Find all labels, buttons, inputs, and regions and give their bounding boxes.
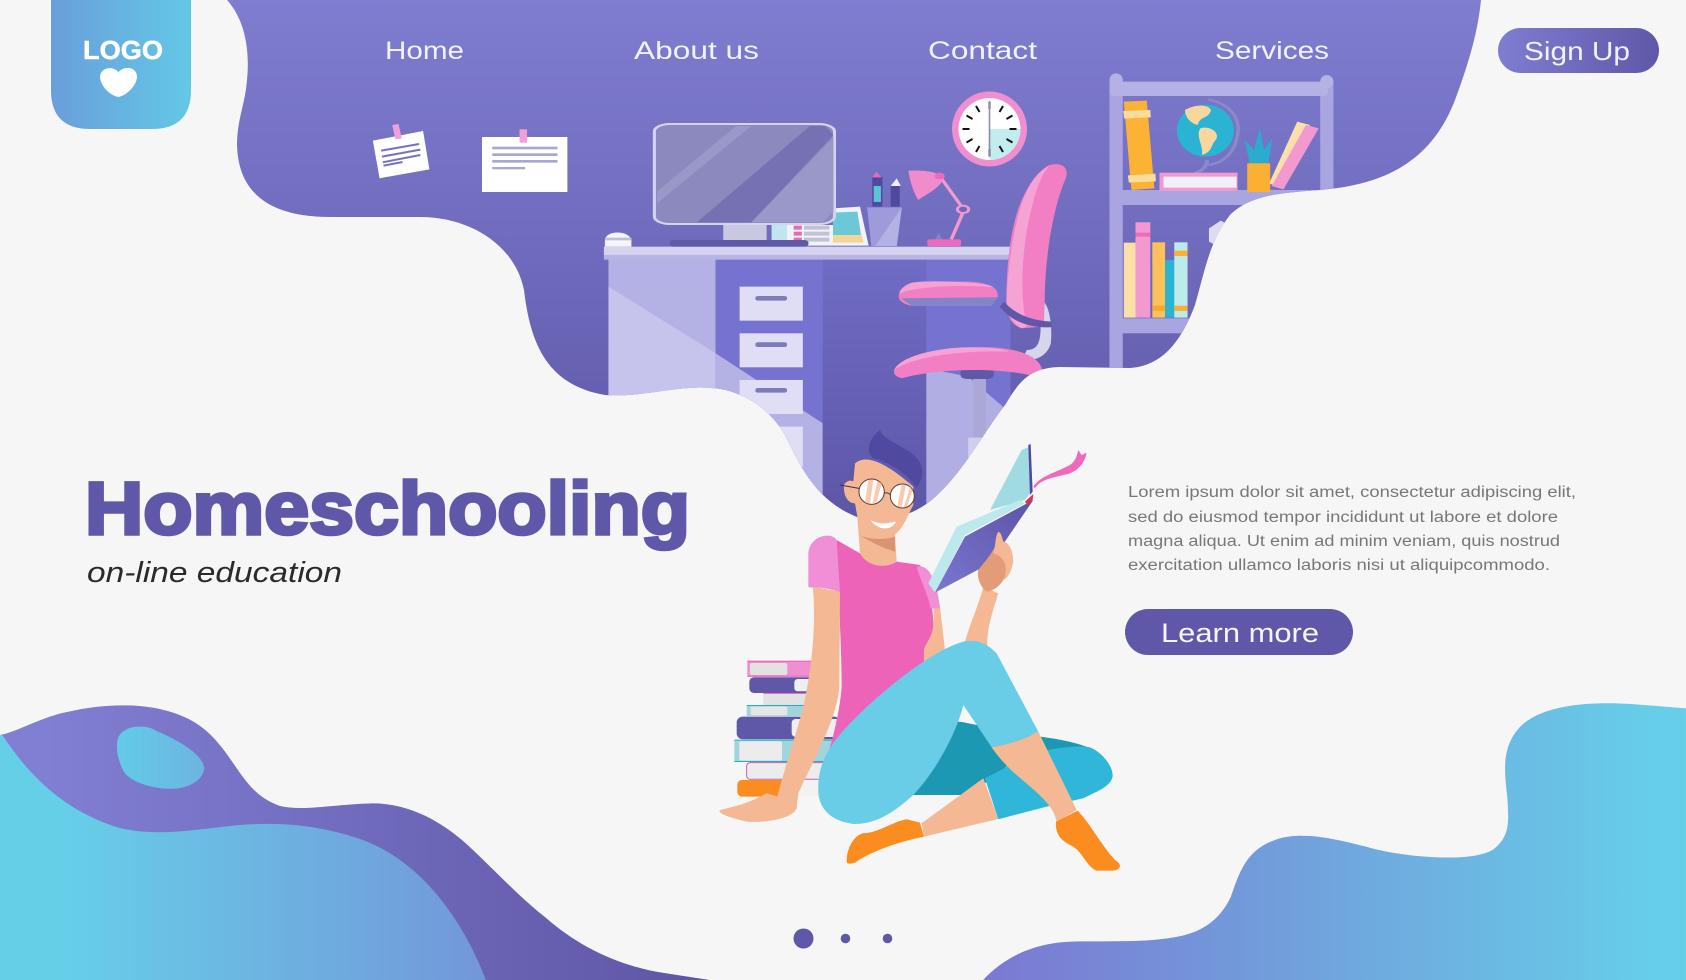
torso shirt	[828, 540, 933, 753]
keyboard	[670, 240, 808, 247]
navigation: Home	[385, 37, 464, 65]
navigation: About us	[634, 37, 759, 65]
icon: heart	[100, 68, 137, 97]
near shin	[992, 732, 1077, 822]
neck	[857, 517, 897, 566]
mouse	[605, 232, 631, 247]
person reading with books	[719, 430, 1120, 871]
subtitle: on-line education	[87, 557, 342, 589]
note left	[373, 124, 429, 178]
lower books	[1124, 222, 1188, 318]
bottom right wave	[983, 703, 1686, 980]
far calf	[922, 778, 998, 837]
hair	[869, 430, 922, 488]
title: Homeschooling	[85, 467, 690, 550]
logo: LOGO	[83, 35, 163, 65]
navigation: Contact	[928, 37, 1037, 65]
mouth	[871, 520, 896, 528]
office chair	[894, 164, 1067, 464]
flat book	[1159, 173, 1238, 191]
plant	[1245, 128, 1272, 192]
pen cup	[867, 172, 902, 246]
learn more button: Learn more	[1161, 618, 1319, 648]
far leg light trouser	[985, 747, 1113, 819]
leaning books	[1269, 122, 1319, 189]
near arm	[719, 587, 840, 822]
head	[840, 430, 922, 538]
far leg dark trouser	[900, 722, 1090, 795]
pagination dots	[794, 928, 892, 948]
hand	[978, 532, 1013, 592]
note right	[482, 129, 567, 192]
book stack	[734, 661, 840, 797]
glasses	[840, 479, 914, 508]
text block: sed do eiusmod tempor incididunt ut labore et dolore	[1128, 509, 1558, 526]
wall clock	[952, 92, 1027, 166]
desk	[604, 247, 1014, 513]
room furniture	[604, 73, 1334, 515]
text block: Lorem ipsum dolor sit amet, consectetur adipiscing elit,	[1128, 484, 1576, 501]
logo	[51, 0, 191, 129]
right sock	[1056, 811, 1120, 871]
monitor	[654, 124, 834, 242]
near thigh	[818, 641, 1038, 824]
drawers	[740, 287, 803, 467]
desk lamp	[908, 171, 969, 246]
sign up button	[1498, 28, 1659, 73]
left sleeve	[808, 536, 840, 592]
panel: top purple wave	[227, 0, 1481, 520]
navigation	[385, 37, 1329, 65]
raised forearm	[965, 587, 998, 647]
text block: magna aliqua. Ut enim ad minim veniam, quis nostrud	[1128, 533, 1560, 550]
text block	[1128, 484, 1576, 574]
learn more button	[1125, 609, 1353, 655]
left sock	[847, 819, 924, 864]
globe	[1177, 99, 1238, 173]
bottom left wave	[0, 705, 709, 980]
navigation: Services	[1215, 37, 1329, 65]
bookshelf	[1110, 73, 1334, 368]
rear upper arm	[924, 607, 945, 665]
panel: room scene	[604, 73, 1334, 515]
yellow binder	[1123, 101, 1156, 190]
open book	[928, 444, 1087, 593]
sign up button: Sign Up	[1524, 36, 1630, 66]
sticky notes	[373, 124, 567, 192]
right sleeve	[917, 566, 940, 608]
calendar	[772, 207, 869, 246]
text block: exercitation ullamco laboris nisi ut aliquipcommodo.	[1128, 557, 1550, 574]
